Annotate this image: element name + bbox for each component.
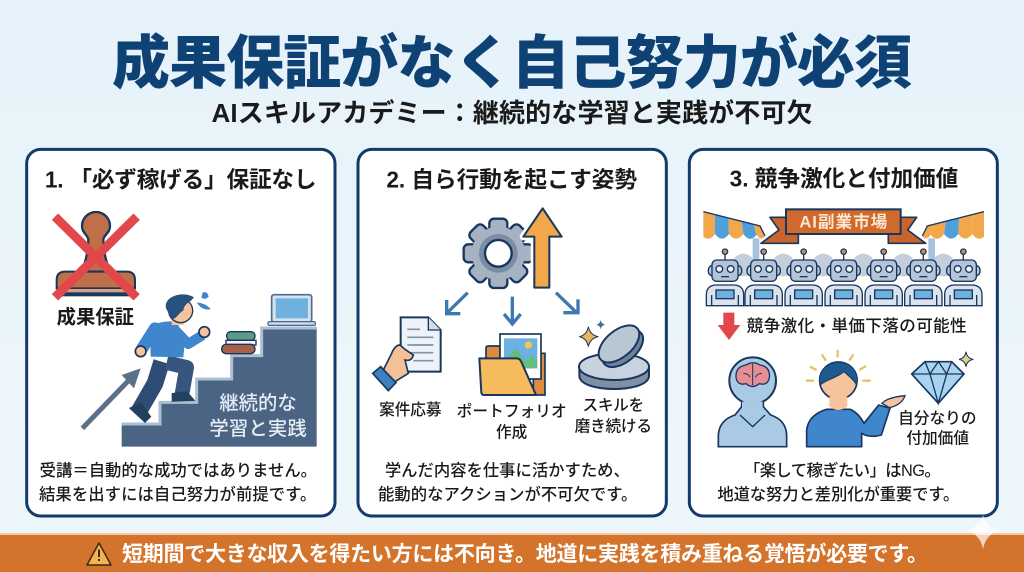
label: portfolio creation bbox=[457, 403, 567, 441]
label: portfolio creation: ポートフォリオ bbox=[457, 403, 567, 421]
label: your own added value: 自分なりの bbox=[898, 409, 976, 427]
label: keep polishing skills: 磨き続ける bbox=[575, 418, 652, 436]
stairs with label bbox=[122, 327, 317, 447]
panel 1 body text bbox=[39, 461, 317, 504]
panel 1 body text: 結果を出すには自己努力が前提です。 bbox=[39, 485, 316, 504]
stamp label: 成果保証 bbox=[57, 305, 134, 328]
icon: hand with document bbox=[373, 317, 441, 391]
panel 1 body text: 受講＝自動的な成功ではありません。 bbox=[40, 461, 317, 480]
stairs text bbox=[209, 392, 307, 440]
icon: orange up arrow bbox=[523, 208, 562, 288]
banner text: AI副業市場 bbox=[799, 211, 888, 231]
panel 2 body text: 学んだ内容を仕事に活かすため、 bbox=[385, 462, 630, 480]
right awning bbox=[922, 212, 984, 262]
icon: books bbox=[222, 332, 256, 354]
panel 2 body text bbox=[378, 462, 637, 504]
competition text: 競争激化・単価下落の可能性 bbox=[747, 317, 967, 336]
market background crowd bbox=[732, 254, 955, 276]
ribbon banner bbox=[761, 209, 926, 243]
left awning bbox=[703, 212, 765, 262]
robots row bbox=[706, 249, 982, 306]
panel 3 body text bbox=[717, 462, 959, 504]
watermark sparkle bbox=[966, 515, 1000, 549]
icon: laptop bbox=[268, 295, 315, 325]
icon: crossed out stamp bbox=[55, 212, 137, 297]
title: 成果保証がなく自己努力が必須 bbox=[112, 31, 912, 96]
footer text: 短期間で大きな収入を得たい方には不向き。地道に実践を積み重ねる覚悟が必要です。 bbox=[122, 542, 928, 566]
icon: warning triangle bbox=[87, 543, 111, 565]
illustration: AI side job market bbox=[703, 209, 984, 306]
panel 3 heading: 3. 競争激化と付加価値 bbox=[730, 166, 958, 192]
icon: whetstone bbox=[579, 318, 650, 389]
panel 2 body text: 能動的なアクションが不可欠です。 bbox=[378, 485, 637, 504]
icon: gear bbox=[464, 219, 533, 288]
label: your own added value: 付加価値 bbox=[906, 429, 969, 447]
panel 1 heading: 1. 「必ず稼げる」保証なし bbox=[45, 166, 316, 192]
panel 3 body text: 地道な努力と差別化が重要です。 bbox=[717, 485, 959, 504]
icon: diamond bbox=[912, 352, 973, 403]
icon: person with brain bbox=[718, 357, 787, 447]
footer banner bbox=[0, 533, 1024, 572]
stairs text: 学習と実践 bbox=[209, 418, 307, 440]
label: job application: 案件応募 bbox=[379, 401, 442, 419]
label: your own added value bbox=[898, 409, 976, 447]
panel: 2 taking action bbox=[358, 149, 666, 516]
icon: three blue arrows bbox=[447, 293, 578, 324]
icon: portfolio folder bbox=[479, 334, 545, 395]
icon: growth arrow bbox=[82, 368, 141, 428]
label: keep polishing skills bbox=[575, 397, 652, 436]
label: portfolio creation: 作成 bbox=[496, 423, 528, 441]
panel: 3 competition and added value bbox=[689, 149, 997, 516]
stairs text: 継続的な bbox=[219, 392, 297, 414]
panel 2 heading: 2. 自ら行動を起こす姿勢 bbox=[386, 166, 637, 192]
subtitle: AIスキルアカデミー：継続的な学習と実践が不可欠 bbox=[212, 98, 812, 128]
panel 3 body text: 「楽して稼ぎたい」はNG。 bbox=[744, 462, 941, 480]
panel: 1 no guarantee bbox=[27, 149, 335, 516]
label: keep polishing skills: スキルを bbox=[582, 397, 644, 415]
icon: person presenting bbox=[806, 350, 905, 447]
icon: red down arrow bbox=[718, 313, 740, 340]
yellow idea rays bbox=[806, 350, 871, 381]
icon: climbing person bbox=[131, 292, 211, 422]
